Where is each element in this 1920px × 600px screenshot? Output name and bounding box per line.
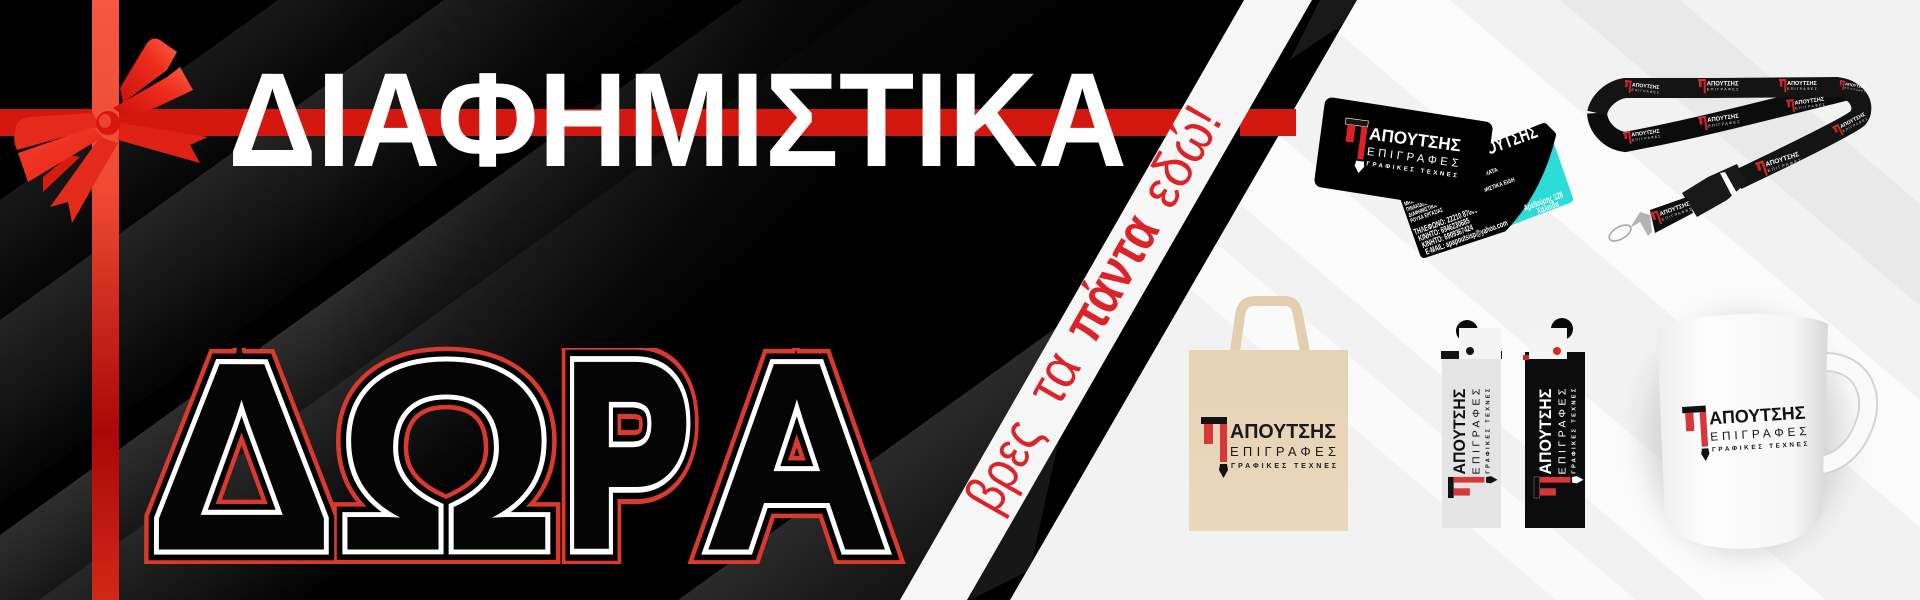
product: lanyard: ΕΠΙΓΡΑΦΕΣ	[1844, 86, 1866, 93]
heading: outlined word: Α	[704, 309, 890, 600]
product: lanyard: ΑΠΟΥΤΣΗΣ	[1765, 151, 1800, 169]
ribbon: horizontal	[0, 109, 1296, 136]
product: tote bag: ΓΡΑΦΙΚΕΣ ΤΕΧΝΕΣ	[1231, 463, 1336, 470]
product: lanyard: ΕΠΙΓΡΑΦΕΣ	[1631, 88, 1659, 95]
heading: outlined word: Ρ	[566, 313, 688, 598]
product: black lighter: ΓΡΑΦΙΚΕΣ ΤΕΧΝΕΣ	[1571, 388, 1577, 474]
product: white mug: ΑΠΟΥΤΣΗΣ	[1709, 403, 1806, 428]
product: lanyard: ΕΠΙΓΡΑΦΕΣ	[1795, 102, 1826, 111]
product: business cards: Χαλκίδα	[1535, 199, 1561, 216]
product: lanyard: ΑΠΟΥΤΣΗΣ	[1787, 81, 1817, 87]
product: black lighter	[1523, 318, 1585, 528]
product: business cards: ΓΡΑΦΙΚΕΣ ΤΕΧΝΕΣ	[1366, 160, 1458, 179]
heading: outlined word: Ρ	[566, 313, 688, 598]
heading: outlined word: Δ	[150, 309, 333, 600]
product: business cards	[1322, 105, 1569, 258]
product: business cards: ΠΙΝΑΚΙΔΕΣ	[1406, 200, 1429, 214]
product: business cards: ΜΗΧΑΝΕΣ	[1404, 195, 1425, 208]
panel: dark background	[0, 0, 1056, 600]
icon: red gift bow	[14, 39, 208, 223]
product: lanyard	[1597, 79, 1869, 244]
product: lanyard: ΕΠΙΓΡΑΦΕΣ	[1787, 87, 1818, 91]
slogan on strip: εδώ!	[1127, 95, 1234, 217]
product: tote bag: ΑΠΟΥΤΣΗΣ	[1230, 421, 1336, 443]
panel: white diagonal strip	[900, 0, 1312, 600]
product: business cards: Αρεθούσης 128	[1522, 189, 1564, 213]
heading: outlined word: Δ	[150, 309, 333, 600]
product: white lighter	[1441, 320, 1502, 528]
product: black lighter: ΑΠΟΥΤΣΗΣ	[1537, 388, 1555, 475]
heading: outlined word: Ρ	[566, 313, 688, 598]
heading: outlined word: Α	[704, 309, 890, 600]
product: lanyard: ΑΠΟΥΤΣΗΣ	[1794, 97, 1825, 107]
product: business cards: ΤΗΛΕΦΩΝΟ: 22210 87000	[1412, 205, 1479, 237]
heading: outlined word: Ω	[338, 308, 555, 600]
heading: outlined word: Ω	[338, 308, 555, 600]
title: ΔΙΑΦΗΜΙΣΤΙΚΑ	[228, 46, 1127, 195]
product: lanyard: ΑΠΟΥΤΣΗΣ	[1631, 128, 1661, 139]
product: lanyard: ΑΠΟΥΤΣΗΣ	[1707, 81, 1739, 87]
product: business cards: ΚΙΝΗΤΟ: 6946230685	[1417, 215, 1471, 243]
slogan on strip	[952, 95, 1234, 522]
product: lanyard: ΕΠΙΓΡΑΦΕΣ	[1708, 119, 1740, 128]
product: white mug: ΕΠΙΓΡΑΦΕΣ	[1710, 424, 1807, 444]
product: lanyard: ΑΠΟΥΤΣΗΣ	[1659, 201, 1691, 218]
product: business cards: ΟΥΤΣΗΣ	[1483, 121, 1540, 160]
product: white lighter: ΕΠΙΓΡΑΦΕΣ	[1471, 388, 1483, 475]
product: lanyard: ΕΠΙΓΡΑΦΕΣ	[1842, 117, 1868, 133]
product: business cards: ΕΠΙΓΡΑΦΕΣ	[1366, 146, 1459, 170]
heading: outlined word: Α	[704, 309, 890, 600]
product: business cards: ΔΙΑΦΗΜΙΣΤΙΚΑ	[1408, 203, 1438, 219]
product: lanyard: ΑΠΟΥΤΣΗΣ	[1632, 82, 1660, 91]
product: lanyard: ΑΠΟΥΤΣΗΣ	[1707, 114, 1740, 124]
product: business cards: ΜΙΣΤΙΚΑ ΕΙΔΗ	[1484, 177, 1516, 194]
product: white mug: ΓΡΑΦΙΚΕΣ ΤΕΧΝΕΣ	[1712, 441, 1808, 454]
product: business cards: ΜΑΤΑ	[1484, 167, 1499, 178]
heading: outlined word: Δ	[150, 309, 333, 600]
product: tote bag: ΕΠΙΓΡΑΦΕΣ	[1230, 444, 1336, 459]
slogan on strip: πάντα	[1049, 203, 1171, 352]
panel: dark diagonal band	[967, 0, 1357, 600]
heading: outlined word: Δ	[150, 309, 333, 600]
product: lanyard: ΕΠΙΓΡΑΦΕΣ	[1661, 206, 1693, 222]
product: tote bag	[1189, 301, 1348, 531]
heading: outlined word: Ρ	[566, 313, 688, 598]
product: lanyard: ΑΠΟΥΤΣΗΣ	[1845, 81, 1867, 90]
product: white lighter: ΓΡΑΦΙΚΕΣ ΤΕΧΝΕΣ	[1485, 388, 1491, 474]
product: lanyard: ΑΠΟΥΤΣΗΣ	[1839, 112, 1866, 130]
product: black lighter: ΕΠΙΓΡΑΦΕΣ	[1557, 388, 1569, 475]
heading: outlined word: Α	[704, 309, 890, 600]
slogan on strip: τα	[1013, 340, 1093, 415]
heading: outlined word	[144, 344, 906, 564]
product: business cards: ΡΟΥΧΑ ΕΡΓΑΣΙΑΣ	[1410, 207, 1444, 225]
product: lanyard: ΕΠΙΓΡΑΦΕΣ	[1632, 134, 1662, 142]
product: business cards: ΑΠΟΥΤΣΗΣ	[1368, 124, 1462, 155]
product: white lighter: ΑΠΟΥΤΣΗΣ	[1451, 388, 1469, 475]
heading: outlined word: Ω	[338, 308, 555, 600]
slogan on strip: βρες	[952, 408, 1053, 522]
panel: light background	[1010, 0, 1920, 600]
heading: outlined word: Ω	[338, 308, 555, 600]
product: lanyard: ΕΠΙΓΡΑΦΕΣ	[1707, 87, 1739, 92]
product: business cards: E-MAIL: apapoutsisp@yahoo.com	[1424, 217, 1509, 257]
ribbon: vertical	[92, 0, 119, 600]
product: business cards: ΚΙΝΗΤΟ: 6909367424	[1420, 222, 1475, 250]
product: white mug	[1645, 314, 1868, 555]
product: lanyard: ΕΠΙΓΡΑΦΕΣ	[1767, 158, 1802, 173]
